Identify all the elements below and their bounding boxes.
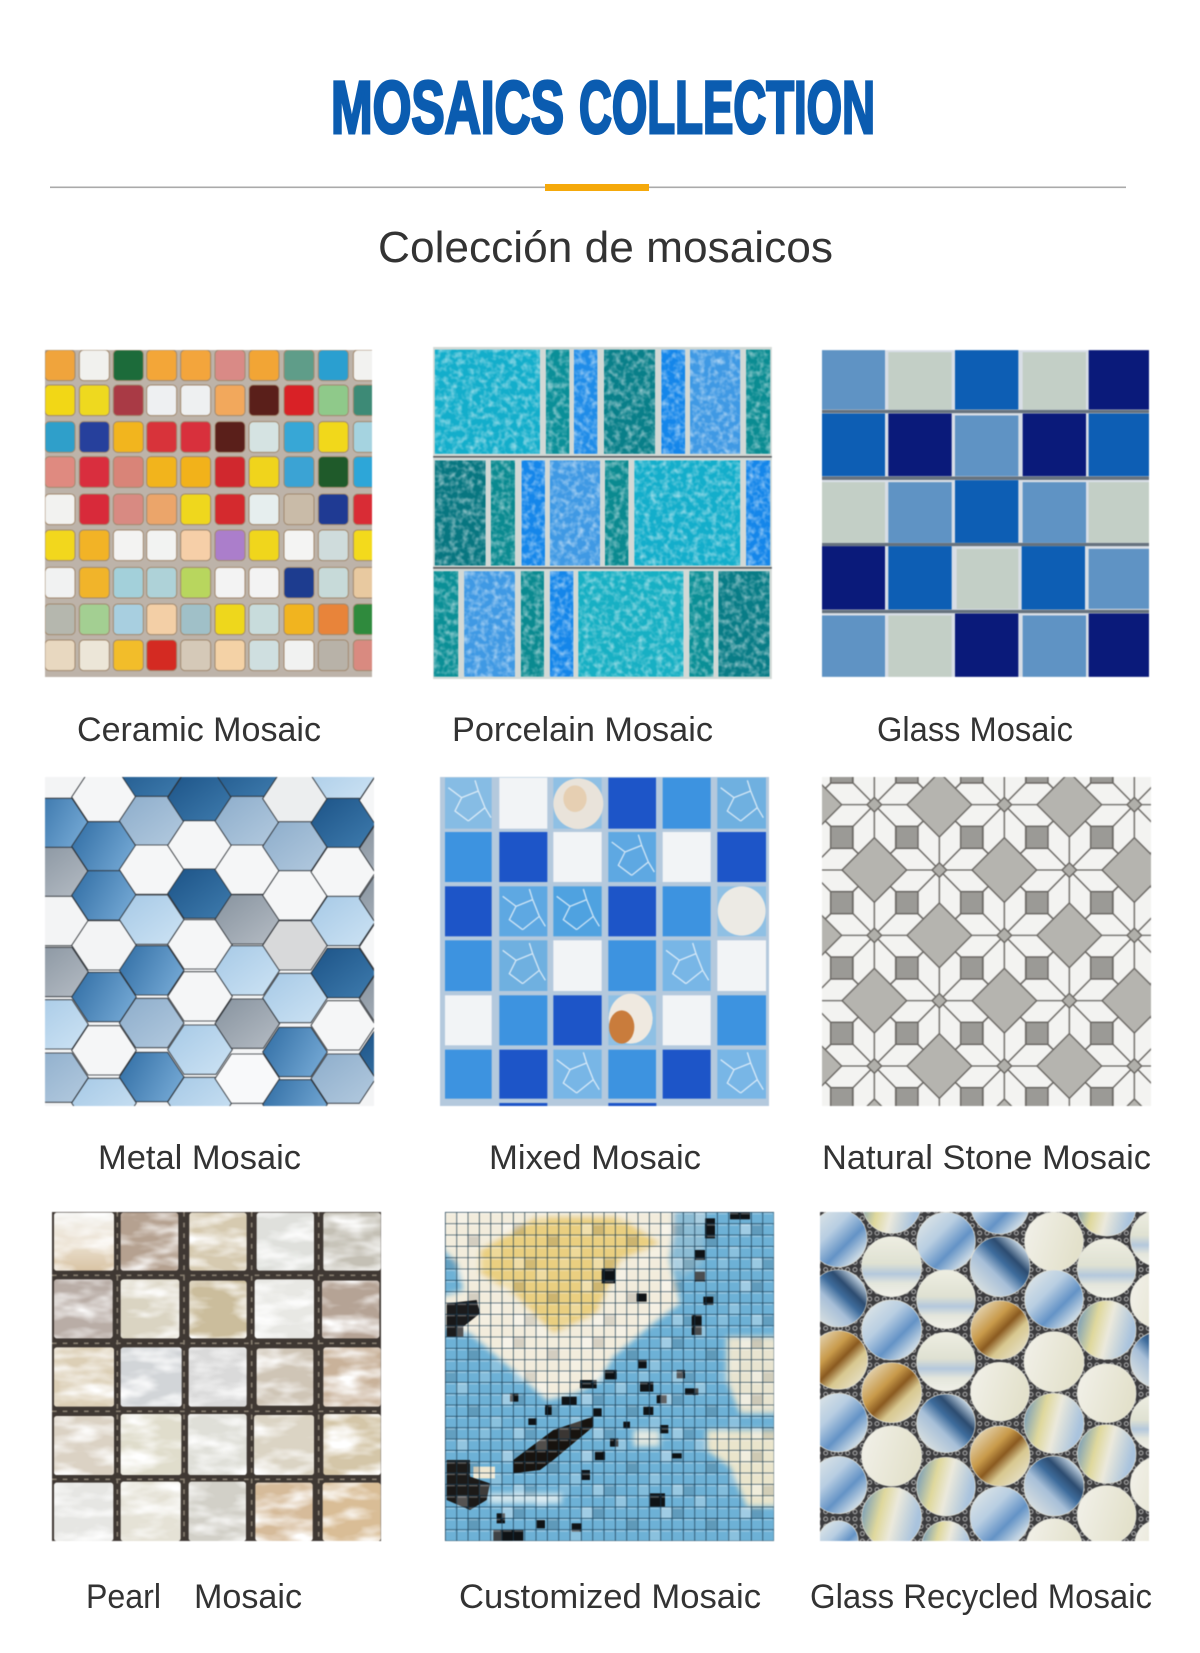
panel: glass mosaic [821, 349, 1150, 749]
label: Metal Mosaic: Metal Mosaic [98, 1139, 301, 1177]
label: Ceramic Mosaic: Ceramic Mosaic [77, 711, 321, 749]
panel: porcelain mosaic [432, 346, 773, 749]
panel: ceramic mosaic [44, 349, 373, 749]
panel: metal mosaic [44, 776, 375, 1177]
label: Pearl Mosaic [86, 1578, 302, 1616]
label: Pearl Mosaic: Pearl [86, 1578, 161, 1616]
mosaic image: pearl [51, 1211, 382, 1542]
mosaic image: ceramic [44, 349, 373, 678]
divider with gold accent [50, 184, 1126, 191]
subtitle: Colección de mosaicos [378, 223, 833, 272]
label: Mixed Mosaic: Mixed Mosaic [489, 1139, 701, 1177]
mosaic image: metal hexagons [44, 776, 375, 1107]
label: Pearl Mosaic: Mosaic [194, 1578, 302, 1616]
mosaic image: recycled glass circles [819, 1211, 1150, 1542]
panel: glass recycled mosaic [810, 1211, 1152, 1616]
mosaic image: mixed glass and shell [440, 776, 770, 1107]
label: Porcelain Mosaic: Porcelain Mosaic [452, 711, 713, 749]
title [331, 70, 875, 142]
panel: pearl mosaic [51, 1211, 382, 1616]
mosaic image: natural stone [821, 776, 1152, 1107]
mosaic image: customized [444, 1211, 775, 1542]
label: Glass Mosaic: Glass Mosaic [877, 711, 1073, 749]
label: Customized Mosaic: Customized Mosaic [459, 1578, 761, 1616]
mosaic image: glass [821, 349, 1150, 678]
panel: mixed mosaic [440, 776, 770, 1177]
panel: natural stone mosaic [821, 776, 1152, 1177]
label: Glass Recycled Mosaic: Glass Recycled Mosaic [810, 1578, 1152, 1616]
panel: customized mosaic [444, 1211, 775, 1616]
mosaic image: porcelain [432, 346, 773, 680]
label: Natural Stone Mosaic: Natural Stone Mosaic [822, 1139, 1151, 1177]
